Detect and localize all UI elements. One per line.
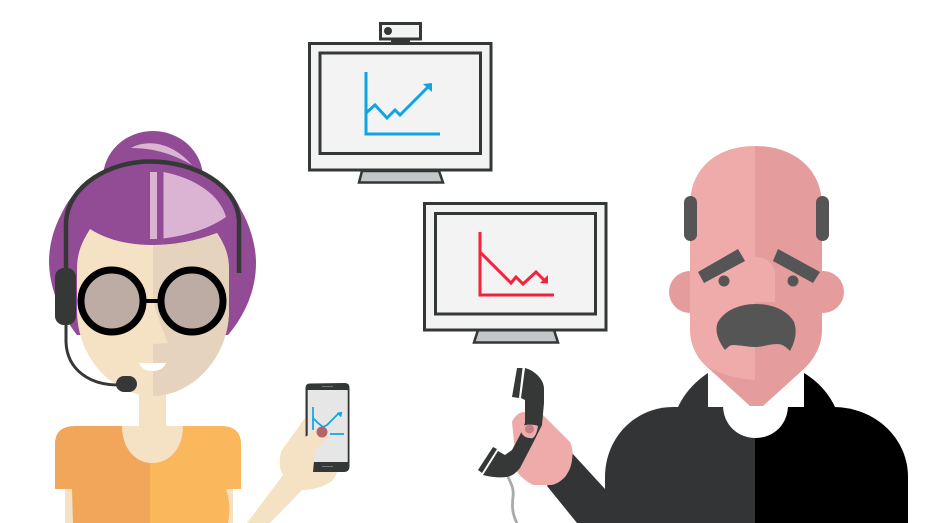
sleeve [547,453,605,523]
fingernail [525,424,534,434]
moustache mouth [716,304,796,351]
smartphone [306,383,350,472]
monitor screen [320,53,480,154]
eyebrows [698,249,745,283]
monitor screen [436,214,596,314]
smile [139,363,166,371]
monitor: falling chart [424,204,606,342]
bun highlight [131,143,192,165]
hair back [49,160,256,335]
neckline [122,426,183,463]
phone speaker [322,386,333,387]
neck [139,390,166,430]
face [77,229,229,396]
skin under sleeves [65,485,233,523]
shirt [55,426,241,523]
icon: webcam [380,24,420,43]
glasses [81,270,223,332]
line chart: falling red [480,232,554,295]
finger [520,425,538,438]
body [605,407,755,523]
monitor stand [474,330,558,342]
woman with headset [49,131,350,523]
monitor frame [310,44,491,170]
hair bun [103,131,203,225]
hand [512,412,573,485]
monitor frame [424,204,606,330]
head left [690,146,755,380]
collar [708,370,804,438]
line chart: rising blue [366,72,440,134]
monitor: rising chart with webcam [310,24,491,182]
hair highlight stripe [150,172,157,239]
fingernail [316,426,328,438]
face shade [153,233,229,396]
telephone cord [508,477,517,523]
head right [706,146,822,406]
monitor stand [359,171,443,182]
lapels [678,373,708,407]
phone chart [313,407,344,434]
nose [755,257,775,302]
ears [669,271,711,313]
arm and hand [247,418,337,523]
eyes [718,276,730,286]
telephone handset [478,368,544,477]
sideburns [684,196,697,241]
headset [55,162,239,392]
sad bald man [478,146,908,523]
hair highlight [164,172,226,238]
